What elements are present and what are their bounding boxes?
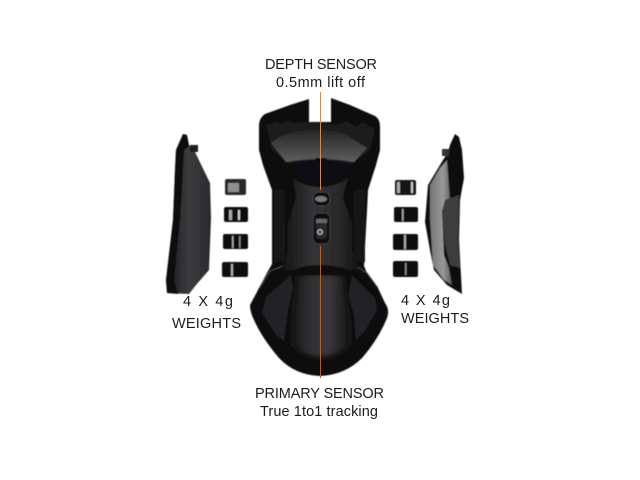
left weight 2	[224, 207, 248, 222]
top sensor button	[313, 192, 330, 206]
right side vents	[354, 190, 365, 262]
upper sensor line	[320, 92, 322, 190]
primary sensor note: True 1to1 tracking	[260, 404, 378, 420]
depth sensor title: DEPTH SENSOR	[265, 57, 377, 73]
depth sensor note: 0.5mm lift off	[276, 75, 366, 91]
right panel shell	[425, 134, 464, 294]
primary sensor title: PRIMARY SENSOR	[255, 386, 384, 402]
central spine	[283, 178, 360, 270]
channel top shadow	[296, 268, 345, 276]
central palm channel	[292, 274, 350, 356]
label: right weights	[401, 293, 469, 327]
right panel inner face	[442, 195, 460, 268]
sensor plate	[313, 213, 330, 244]
right palm panel	[348, 275, 377, 340]
wing highlight left	[258, 266, 283, 290]
left palm panel	[262, 275, 293, 341]
wing highlight right	[358, 267, 378, 288]
left weight 4	[222, 262, 248, 277]
sensor line	[320, 92, 322, 378]
right side panel	[425, 134, 464, 294]
lower dark cavity	[286, 160, 352, 182]
left weight 3	[223, 234, 248, 249]
left panel shell	[166, 134, 211, 294]
left weights word: WEIGHTS	[172, 316, 241, 332]
right panel screw	[442, 149, 449, 156]
front grey panel	[271, 130, 367, 162]
right panel light face	[430, 160, 452, 285]
right weight 1	[395, 180, 416, 195]
left side vents	[274, 190, 285, 262]
left panel screw	[190, 145, 198, 152]
right weight 3	[393, 234, 418, 250]
right weight 2	[394, 207, 418, 222]
body outer shell	[250, 98, 388, 376]
left panel dark rim	[166, 134, 189, 294]
left weight 1	[225, 179, 246, 195]
top cover ridge	[266, 121, 375, 165]
left side panel	[166, 134, 211, 294]
label: left weights	[172, 294, 241, 332]
left weights count: 4 X 4g	[183, 294, 233, 310]
label: primary sensor	[255, 386, 384, 420]
right weight 4	[393, 261, 418, 277]
right weights	[393, 180, 418, 277]
label: depth sensor	[265, 57, 377, 91]
left weights	[222, 179, 248, 277]
right weights count: 4 X 4g	[401, 293, 450, 309]
lower sensor line	[320, 246, 322, 378]
right weights word: WEIGHTS	[401, 311, 469, 327]
mouse body	[250, 98, 388, 376]
dark notch	[315, 158, 327, 162]
palm rest	[254, 265, 386, 371]
